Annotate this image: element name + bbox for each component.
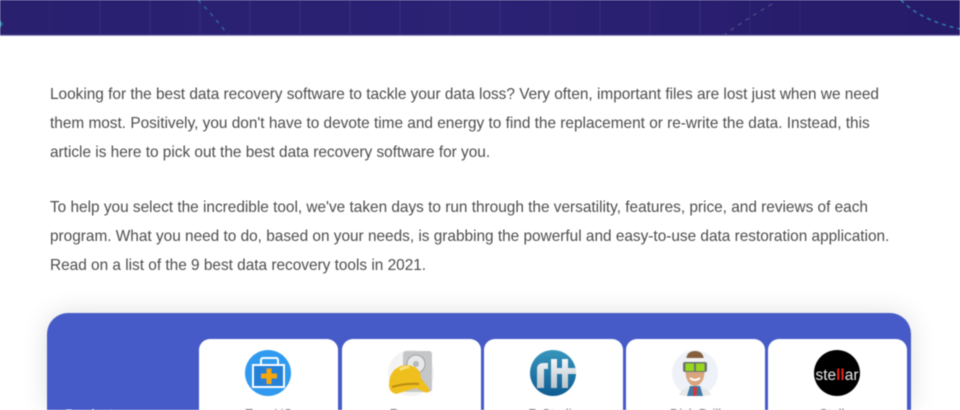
card: EaseUS xyxy=(199,338,338,410)
intro paragraph 2: Read on a list of the 9 best data recovery tools in 2021. xyxy=(50,257,426,274)
intro paragraph 2: program. What you need to do, based on your needs, is grabbing the powerful and easy-to-use data restoration application. xyxy=(50,228,889,245)
card: Stellar xyxy=(768,338,907,410)
icon: man with goggles xyxy=(672,350,718,397)
intro paragraph 1: Looking for the best data recovery software to tackle your data loss? Very often, important files are lost just when we need xyxy=(50,86,879,103)
card: R-Studio xyxy=(484,338,623,410)
icon: rtt logo xyxy=(529,349,577,397)
comparison table panel xyxy=(47,313,911,410)
icon: hard drive with helmet xyxy=(388,350,434,396)
icon: stellar logo xyxy=(813,349,861,397)
card: Disk Drill xyxy=(626,338,765,410)
icon: stellar logo: stellar xyxy=(815,367,859,384)
intro paragraph 1: article is here to pick out the best data recovery software for you. xyxy=(50,144,490,161)
top banner xyxy=(0,0,960,36)
icon: medical kit xyxy=(244,349,292,397)
card: Recuva xyxy=(342,338,481,410)
intro paragraph 1 xyxy=(50,86,879,162)
intro paragraph 2 xyxy=(50,199,889,274)
intro paragraph 2: To help you select the incredible tool, we've taken days to run through the versatility, features, price, and reviews of each xyxy=(50,199,868,216)
intro paragraph 1: them most. Positively, you don't have to devote time and energy to find the replacement or re-write the data. Instead, this xyxy=(50,115,870,132)
